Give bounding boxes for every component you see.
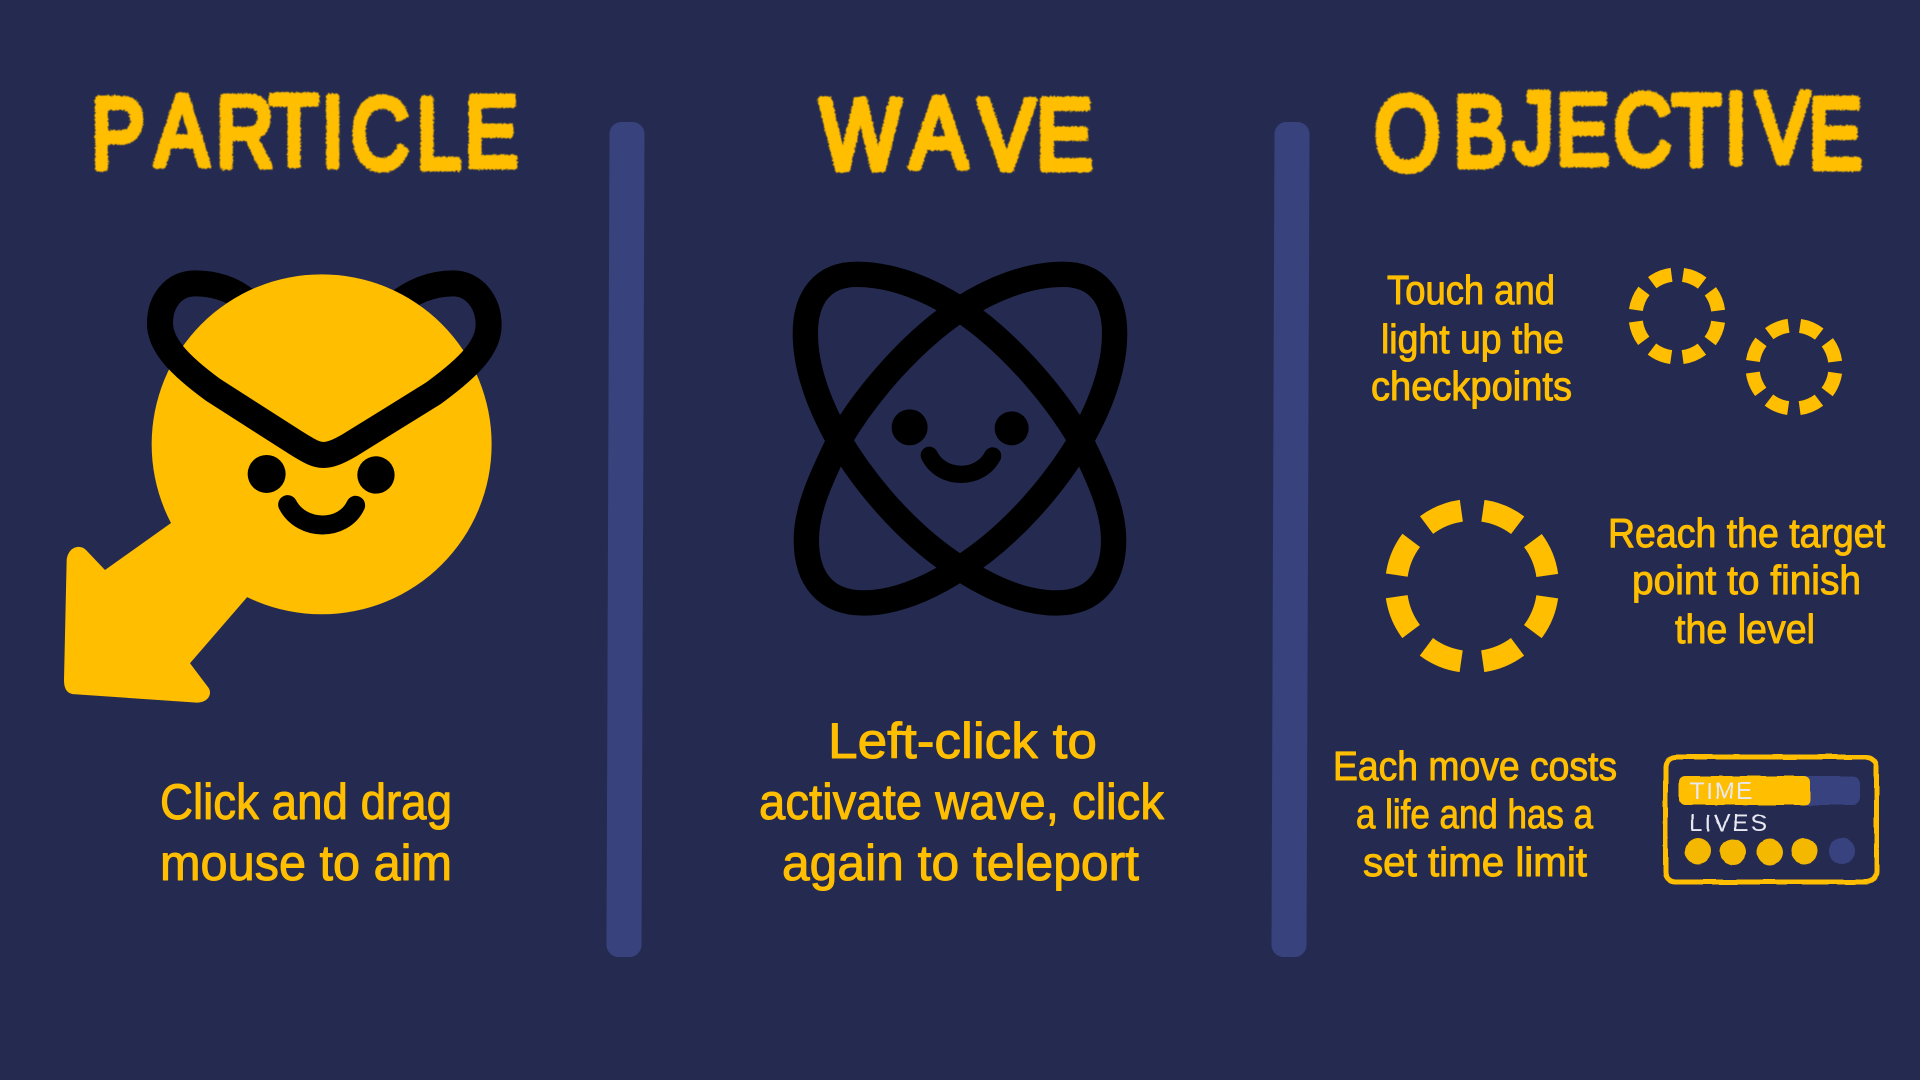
text: moves and time: set time limit bbox=[1363, 839, 1588, 885]
icon: target ring bbox=[1396, 510, 1548, 662]
divider left bbox=[606, 122, 645, 957]
text: moves and time bbox=[1333, 743, 1617, 885]
orbit in front of body bbox=[160, 323, 489, 455]
right eye bbox=[995, 411, 1029, 445]
time bar track bbox=[1679, 776, 1860, 805]
smile bbox=[929, 455, 993, 474]
text: checkpoints bbox=[1371, 267, 1572, 409]
body bbox=[152, 274, 492, 614]
divider right bbox=[1271, 122, 1310, 957]
caption: wave bbox=[759, 713, 1165, 891]
text: checkpoints: light up the bbox=[1381, 316, 1564, 362]
time bar fill bbox=[1679, 776, 1810, 805]
text: target: Reach the target bbox=[1608, 510, 1886, 556]
heading: objective: O bbox=[1374, 75, 1440, 193]
panel: particle bbox=[64, 76, 518, 891]
text: target bbox=[1608, 510, 1886, 652]
heading: particle: PARTICLE bbox=[91, 76, 518, 190]
text: moves and time: Each move costs bbox=[1333, 743, 1617, 789]
life dots bbox=[1685, 838, 1855, 865]
caption: particle bbox=[160, 774, 452, 891]
panel: wave bbox=[759, 76, 1165, 891]
orbit two bbox=[806, 274, 1115, 603]
caption: particle: mouse to aim bbox=[160, 835, 452, 891]
panel: objective bbox=[1333, 73, 1886, 885]
left eye bbox=[892, 409, 928, 445]
icon: particle character with arrow bbox=[64, 274, 492, 703]
text: target: the level bbox=[1675, 606, 1815, 652]
caption: wave: activate wave, click bbox=[759, 774, 1165, 830]
left eye bbox=[248, 455, 286, 493]
caption: particle: Click and drag bbox=[160, 774, 452, 830]
time label: TIME bbox=[1690, 778, 1752, 805]
lives label: LIVES bbox=[1689, 810, 1767, 837]
text: checkpoints: checkpoints bbox=[1371, 363, 1572, 409]
hud frame bbox=[1666, 757, 1876, 882]
text: moves and time: a life and has a bbox=[1356, 791, 1593, 837]
text: checkpoints: Touch and bbox=[1387, 267, 1555, 313]
icon: checkpoint rings bbox=[1636, 274, 1836, 408]
hud: time and lives bbox=[1666, 757, 1876, 882]
right eye bbox=[357, 456, 395, 494]
caption: wave: again to teleport bbox=[782, 835, 1139, 891]
smile bbox=[288, 505, 356, 525]
orbit behind body bbox=[160, 283, 489, 455]
arrow bbox=[64, 517, 253, 703]
orbit one bbox=[805, 274, 1114, 603]
icon: wave atom character bbox=[805, 274, 1115, 603]
heading: wave: WAVE bbox=[820, 76, 1093, 191]
caption: wave: Left-click to bbox=[828, 713, 1097, 769]
heading: objective: BJECTIVE bbox=[1454, 73, 1862, 190]
text: target: point to finish bbox=[1632, 557, 1861, 603]
